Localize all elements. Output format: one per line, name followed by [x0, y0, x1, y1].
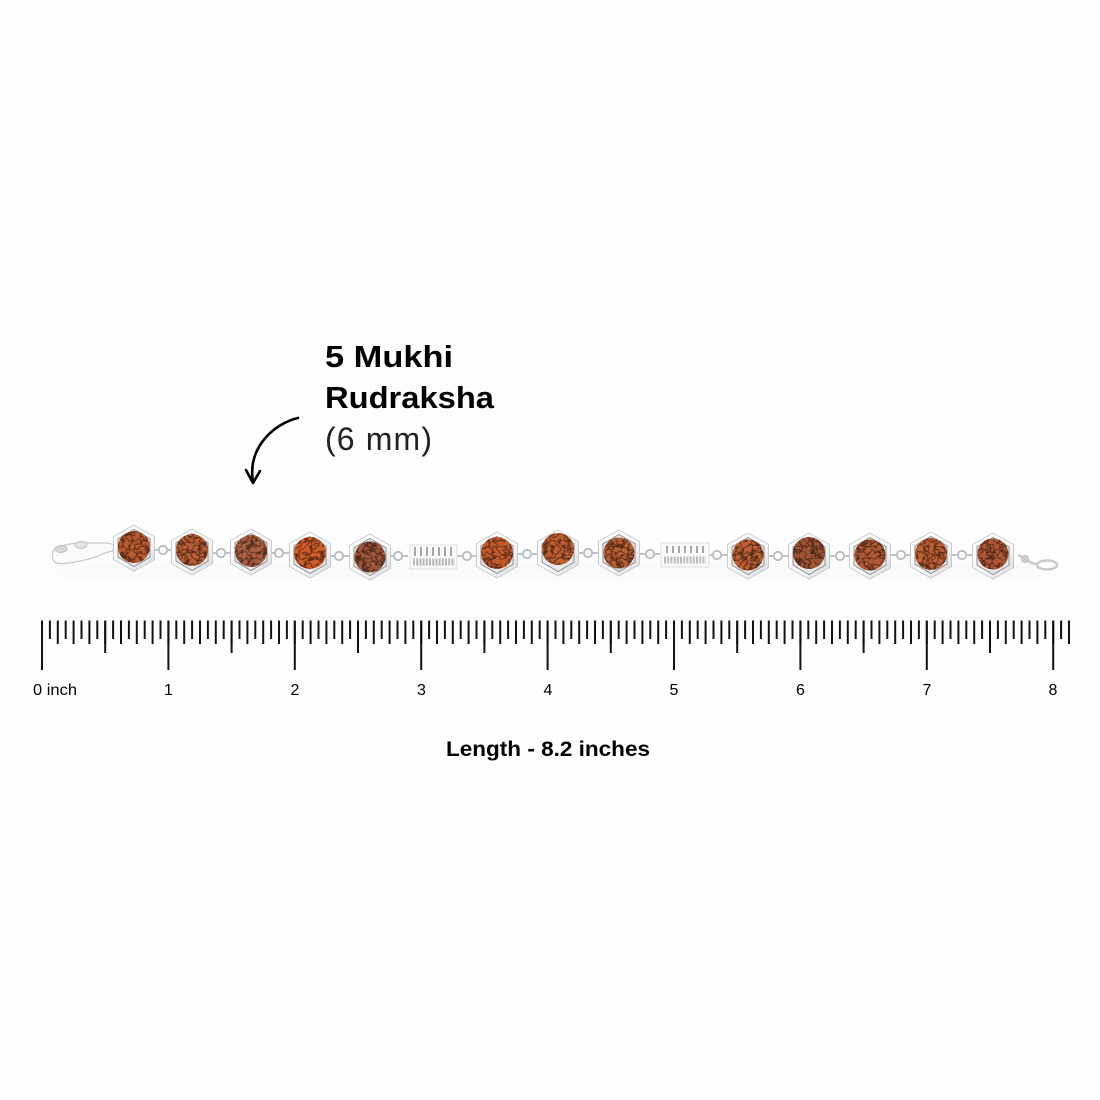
bracelet shadow — [60, 566, 1040, 574]
ruler ticks — [41, 620, 1071, 670]
ruler labels: 3 — [417, 682, 426, 699]
ruler labels: 8 — [1049, 682, 1058, 699]
bracelet — [52, 525, 1057, 580]
bead 10 — [788, 533, 830, 579]
spacer bar 2 — [661, 543, 709, 567]
bead 9 — [728, 533, 768, 579]
bead 1 — [114, 525, 154, 571]
ruler labels: 2 — [291, 682, 300, 699]
bead 7 — [538, 530, 578, 576]
bead 13 — [972, 533, 1014, 579]
length caption: Length - 8.2 inches — [446, 738, 650, 761]
bead 12 — [910, 532, 952, 578]
clasp left — [52, 542, 114, 564]
ruler labels — [33, 682, 1058, 699]
ruler labels: 7 — [923, 682, 932, 699]
callout heading: 5 Mukhi Rudraksha (6 mm): 5 Mukhi — [325, 339, 453, 374]
ruler labels: 4 — [544, 682, 553, 699]
callout heading: 5 Mukhi Rudraksha (6 mm) — [325, 339, 495, 457]
link rings — [153, 546, 972, 560]
bead 8 — [598, 530, 640, 576]
bead 4 — [290, 532, 330, 578]
bead 11 — [850, 533, 890, 579]
bead 2 — [172, 529, 212, 575]
ruler labels: 6 — [796, 682, 805, 699]
spacer bar 1 — [410, 545, 457, 569]
ruler labels: 5 — [670, 682, 679, 699]
callout heading: 5 Mukhi Rudraksha (6 mm): (6 mm) — [325, 421, 432, 457]
bead 6 — [476, 532, 518, 578]
ruler labels: 0 inch — [33, 682, 77, 699]
bead 3 — [230, 529, 272, 575]
arrow pointing to bead — [246, 418, 298, 483]
ruler labels: 1 — [164, 682, 173, 699]
clasp right — [1018, 555, 1057, 570]
bead 5 — [350, 534, 390, 580]
callout heading: 5 Mukhi Rudraksha (6 mm): Rudraksha — [325, 380, 495, 415]
